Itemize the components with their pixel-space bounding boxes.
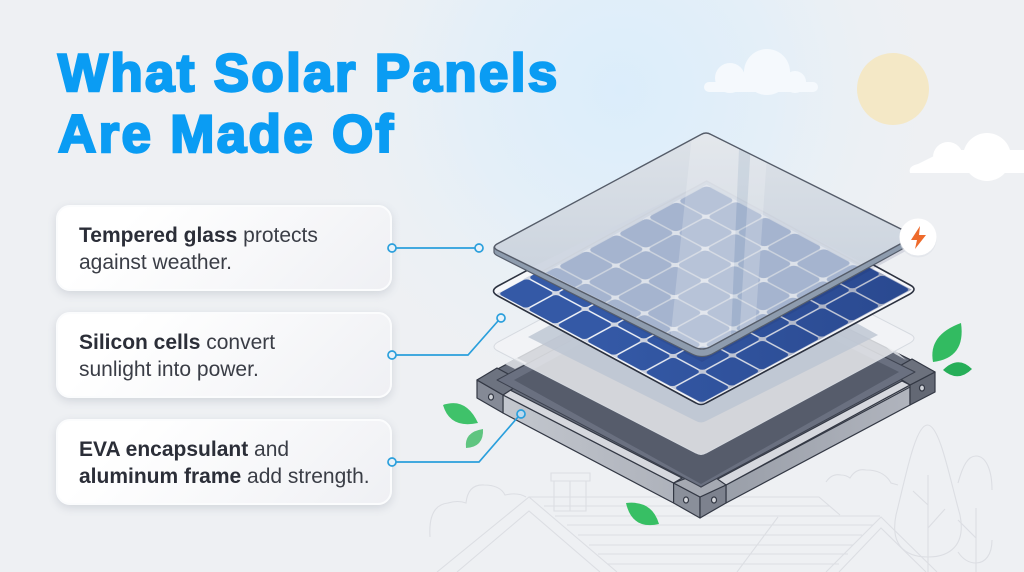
card: silicon cells: sunlight into power. <box>79 358 259 381</box>
card: EVA and aluminum: aluminum frame add strength. <box>79 465 370 488</box>
cells seen through glass <box>546 150 858 350</box>
frame dark center <box>514 276 899 484</box>
right corner block <box>889 359 935 405</box>
aluminum frame <box>477 258 935 518</box>
left rail <box>503 390 682 503</box>
left corner block <box>477 368 523 413</box>
right rail <box>716 381 910 503</box>
title: Are Made Of <box>58 105 395 164</box>
frame surface <box>477 258 935 497</box>
glass shadow <box>494 236 915 362</box>
leaf: bottom <box>626 503 659 525</box>
card: EVA and aluminum: EVA encapsulant and <box>79 438 289 461</box>
connector: silicon cells <box>388 314 505 359</box>
glass top face <box>494 133 915 349</box>
card: silicon cells: Silicon cells convert <box>79 331 275 354</box>
silicon cell layer <box>494 174 914 404</box>
leaf: left upper <box>443 403 478 424</box>
card: tempered glass <box>56 205 392 291</box>
glass outline <box>494 133 915 349</box>
icon: lightning badge <box>900 218 936 258</box>
connector: EVA and frame <box>388 410 525 466</box>
glass edge <box>494 236 915 356</box>
frame inner panel <box>497 268 915 487</box>
sun <box>857 53 929 125</box>
EVA encapsulant sheet <box>494 230 914 454</box>
card: tempered glass: Tempered glass protects <box>79 224 318 247</box>
cloud: right <box>910 133 1024 181</box>
leaf: right large <box>932 323 962 362</box>
tempered glass sheet <box>493 132 904 362</box>
illustration scene <box>430 0 1024 572</box>
card: EVA and aluminum <box>56 419 392 505</box>
leaf: right small <box>943 362 972 376</box>
rear strips <box>505 358 527 369</box>
connector: glass <box>388 244 483 252</box>
card: silicon cells <box>56 312 392 398</box>
house and trees line art <box>430 425 992 572</box>
bottom corner block <box>674 478 726 518</box>
cloud: upper <box>704 49 818 95</box>
cell grid <box>497 180 912 404</box>
glass reflection bands <box>671 180 737 348</box>
panel shadow on sheet <box>528 240 878 422</box>
cell panel outline <box>494 174 914 404</box>
leaf: left lower <box>466 429 483 448</box>
title: What Solar Panels <box>58 44 560 103</box>
title <box>56 44 560 164</box>
card: tempered glass: against weather. <box>79 251 232 274</box>
